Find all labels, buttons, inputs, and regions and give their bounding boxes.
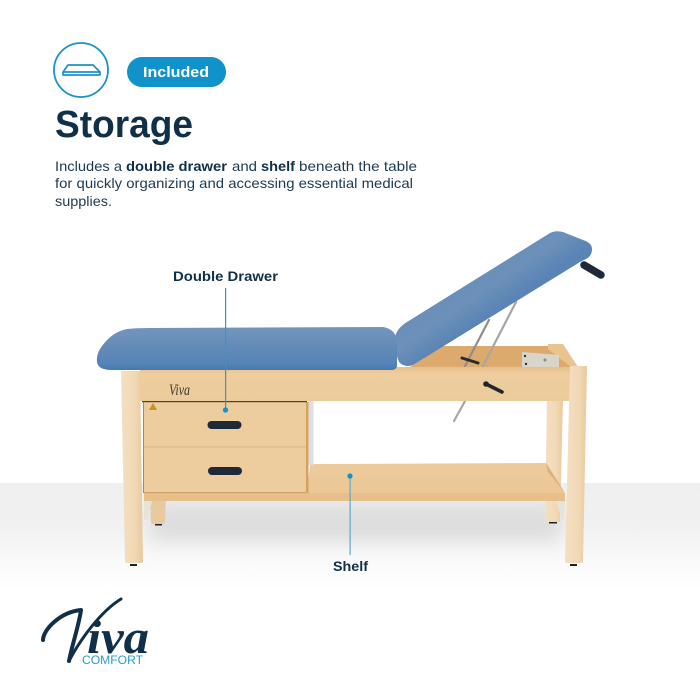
logo: Viva Comfort: iva bbox=[87, 611, 149, 664]
back legs bbox=[150, 398, 563, 526]
badge: Included: Included bbox=[143, 64, 209, 81]
callout: Double Drawer: Double Drawer bbox=[173, 268, 279, 284]
drawer handles bbox=[208, 421, 242, 429]
warning label bbox=[149, 403, 157, 410]
apron small logo: Viva bbox=[169, 382, 190, 399]
inner tray of frame bbox=[410, 344, 578, 367]
raised cushion bbox=[395, 231, 592, 366]
description text bbox=[55, 158, 417, 209]
floor shadow bbox=[150, 505, 560, 541]
icon: storage tray in circle bbox=[54, 43, 108, 97]
front legs bbox=[121, 366, 587, 566]
badge: Included bbox=[127, 57, 226, 87]
support rods bbox=[454, 302, 516, 421]
title: Storage bbox=[55, 104, 193, 146]
logo: Viva Comfort: COMFORT bbox=[82, 655, 143, 667]
description text: for quickly organizing and accessing essential medical bbox=[55, 175, 413, 191]
shelf bbox=[144, 463, 565, 501]
exam table photo illustration bbox=[97, 231, 601, 566]
headrest handle bbox=[584, 265, 601, 275]
description text: and bbox=[232, 158, 257, 174]
description text: beneath the table bbox=[299, 158, 417, 174]
logo: Viva Comfort bbox=[43, 599, 149, 667]
callout: Double Drawer bbox=[173, 268, 279, 413]
drawer unit bbox=[142, 401, 314, 493]
floor backdrop bbox=[0, 483, 700, 590]
description text: Includes a bbox=[55, 158, 122, 174]
flat cushion bbox=[97, 327, 397, 370]
description text: double drawer bbox=[126, 158, 228, 174]
apron bbox=[140, 367, 571, 401]
description text: supplies. bbox=[55, 193, 112, 209]
description text: shelf bbox=[261, 158, 295, 174]
apron crank handle bbox=[483, 381, 502, 392]
callout: Shelf: Shelf bbox=[333, 558, 368, 574]
callout: Shelf bbox=[333, 473, 368, 574]
